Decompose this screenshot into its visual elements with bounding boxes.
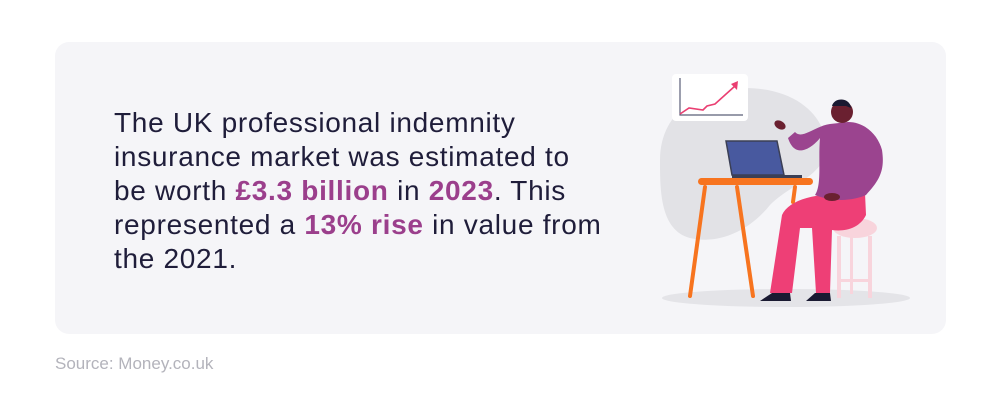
text block: statistic: The UK professional indemnity xyxy=(114,107,516,138)
text block: statistic: be worth £3.3 billion in 2023. This xyxy=(114,175,566,206)
desk xyxy=(690,178,813,296)
text block: statistic: insurance market was estimated to xyxy=(114,141,570,172)
person xyxy=(760,99,883,301)
source note: Source: Money.co.uk xyxy=(55,354,213,373)
grey blob xyxy=(660,88,826,240)
stool xyxy=(833,218,877,298)
icon: chart card xyxy=(672,74,748,121)
text block: statistic xyxy=(114,107,602,274)
laptop xyxy=(726,141,802,178)
panel: card xyxy=(55,42,946,334)
floor shadow xyxy=(662,289,910,307)
text block: statistic: represented a 13% rise in value from xyxy=(114,209,602,240)
text block: statistic: the 2021. xyxy=(114,243,237,274)
